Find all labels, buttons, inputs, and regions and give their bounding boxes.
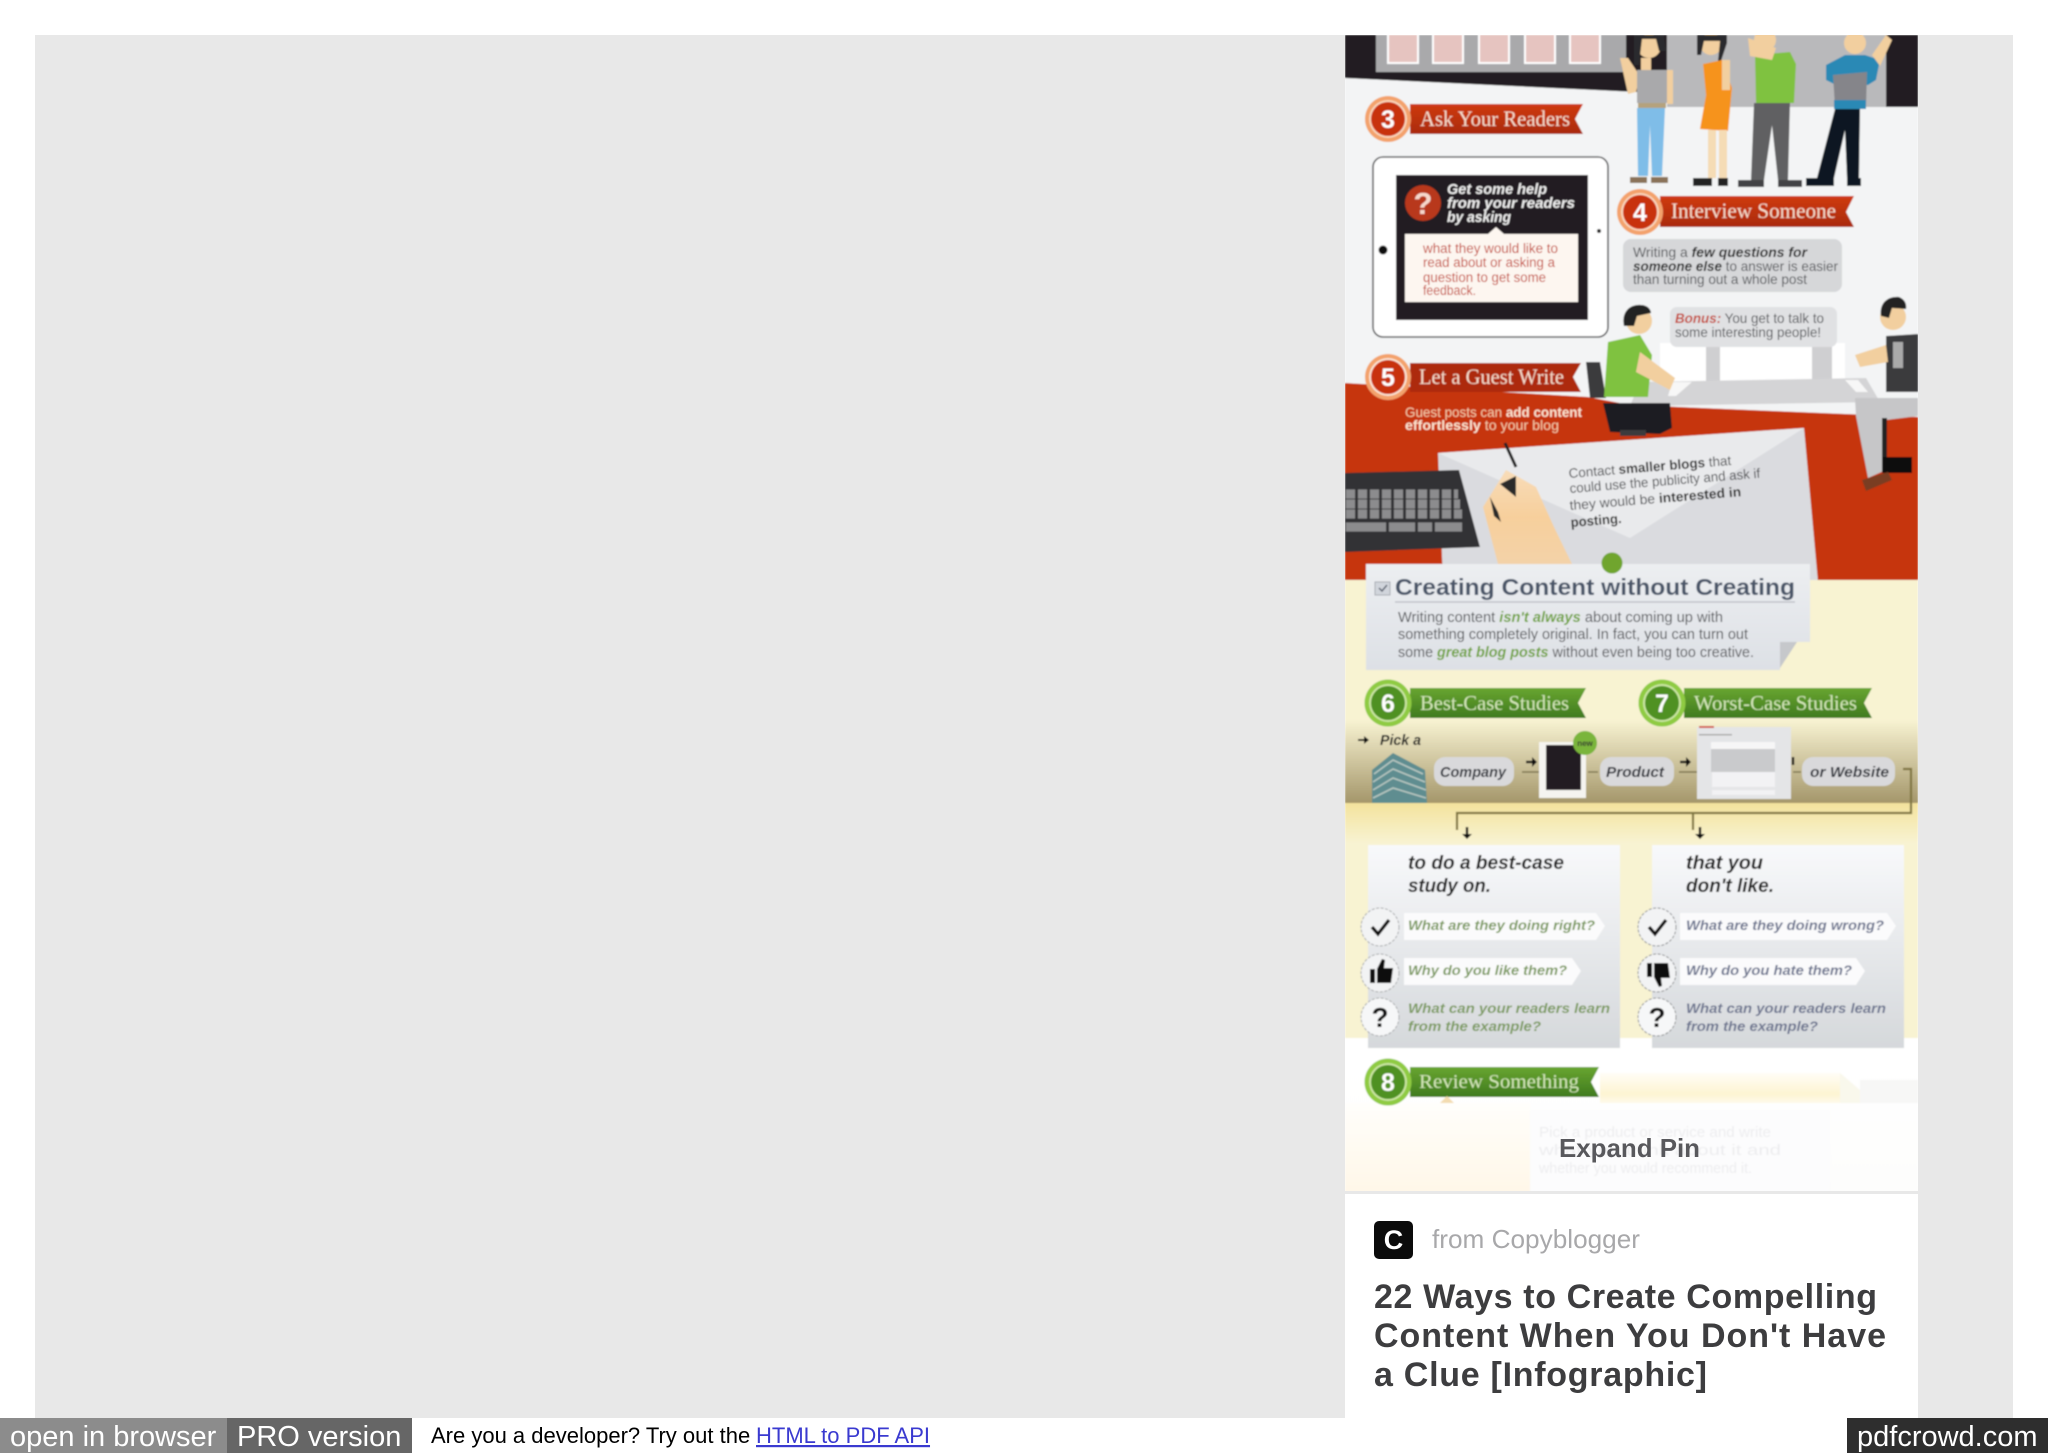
- heading: 4 Interview Someone: 4: [1633, 199, 1647, 227]
- person: interviewer in green: [1586, 305, 1675, 436]
- speech bubble: interview tip: someone else to answer is easier: [1633, 258, 1838, 274]
- envelope text: [1568, 453, 1761, 530]
- icon: question: ?: [1371, 1002, 1389, 1033]
- expand pin label: Expand Pin: [1559, 1133, 1700, 1163]
- question pills: [1404, 913, 1605, 985]
- section body text: some great blog posts without even being too creative.: [1398, 644, 1754, 661]
- pill: product: Product: [1606, 764, 1665, 781]
- infographic image: [1345, 29, 1918, 1192]
- developer promo text: [431, 1423, 930, 1448]
- question text: [1686, 917, 1886, 1034]
- question text: What can your readers learn: [1686, 1000, 1886, 1016]
- speech bubble: interview tip: than turning out a whole post: [1633, 271, 1807, 287]
- red background shape: [1345, 383, 1918, 582]
- envelope text: Contact smaller blogs that: [1568, 453, 1732, 481]
- heading: 3 Ask Your Readers: Ask Your Readers: [1420, 106, 1570, 131]
- flow: pick a company, product or website: [1358, 726, 1911, 839]
- connector to panels: [1457, 769, 1911, 839]
- panel heading: that you: [1686, 853, 1763, 874]
- panel: best case study: [1361, 845, 1620, 1048]
- question text: [1408, 917, 1610, 1034]
- heading: 3 Ask Your Readers: 3: [1381, 106, 1395, 134]
- faded review text: Pick a product or service and write: [1539, 1124, 1771, 1141]
- panel heading: don't like.: [1686, 876, 1774, 897]
- flow arrows: [1522, 757, 1801, 772]
- speech bubble: bonus: some interesting people!: [1675, 324, 1821, 340]
- question text: What can your readers learn: [1408, 1000, 1610, 1016]
- label: pick a: [1357, 733, 1422, 746]
- pin title: Content When You Don't Have: [1374, 1317, 1886, 1355]
- pin title: a Clue [Infographic]: [1374, 1356, 1707, 1394]
- tablet heading text: Get some help: [1447, 181, 1547, 198]
- faded review text: whether you would recommend it.: [1538, 1160, 1752, 1177]
- developer promo text: HTML to PDF API: [756, 1423, 930, 1448]
- icon: website browser: [1697, 726, 1791, 799]
- heading: 6 Best-Case Studies: Best-Case Studies: [1420, 691, 1569, 715]
- pin title: 22 Ways to Create Compelling: [1374, 1278, 1877, 1316]
- heading: 3 Ask Your Readers: [1365, 96, 1583, 142]
- pill: company: Company: [1440, 764, 1507, 781]
- section card: creating content without creating: [1366, 552, 1810, 670]
- speech bubble: bonus: [1670, 307, 1837, 347]
- heading: 4 Interview Someone: [1617, 189, 1854, 235]
- icon: question mark: ?: [1414, 186, 1432, 221]
- question text: What are they doing wrong?: [1686, 917, 1884, 933]
- speech bubble: interview tip: Writing a few questions for: [1633, 244, 1809, 260]
- icon: question: [1638, 998, 1676, 1036]
- heading: 7 Worst-Case Studies: [1638, 680, 1872, 726]
- pill: or website: [1802, 757, 1895, 786]
- tablet note: feedback.: [1423, 283, 1476, 298]
- tablet note: what they would like to: [1422, 241, 1558, 256]
- heading: 6 Best-Case Studies: [1364, 680, 1586, 726]
- section body text: something completely original. In fact, you can turn out: [1398, 626, 1749, 643]
- faded review text: what you think about it and: [1538, 1142, 1781, 1159]
- speech bubble: bonus: Bonus: You get to talk to: [1675, 310, 1824, 326]
- person: woman in grey top: [1620, 34, 1673, 183]
- heading: 8 Review Something: [1364, 1058, 1599, 1106]
- illustration: four people: [1620, 29, 1892, 187]
- icon: thumbs up: [1361, 954, 1399, 992]
- question text: Why do you hate them?: [1686, 962, 1852, 978]
- panel: worst case study: [1638, 845, 1904, 1048]
- question text: from the example?: [1686, 1018, 1818, 1034]
- panel heading: study on.: [1408, 876, 1491, 897]
- pill: product: [1600, 757, 1674, 786]
- section body text: Writing content isn't always about coming up with: [1398, 609, 1723, 626]
- button: open in browser: open in browser: [10, 1421, 217, 1453]
- tablet heading text: [1447, 181, 1575, 226]
- icon: building: [1372, 753, 1427, 803]
- heading: 8 Review Something: 8: [1381, 1069, 1395, 1097]
- faded review text: [1538, 1124, 1781, 1177]
- question pills: [1680, 913, 1896, 985]
- icon: check: [1361, 908, 1399, 946]
- guest post text: effortlessly to your blog: [1405, 417, 1559, 433]
- divider line: [1345, 1191, 1918, 1194]
- panel heading: [1686, 853, 1774, 897]
- envelope paper: [1438, 428, 1818, 582]
- question text: Why do you like them?: [1408, 962, 1567, 978]
- illustration: keyboard: [1345, 470, 1480, 552]
- question text: What are they doing right?: [1408, 917, 1595, 933]
- person: man in blue shirt: [1806, 32, 1892, 186]
- question text: from the example?: [1408, 1018, 1541, 1034]
- tablet with reader question: [1373, 157, 1608, 337]
- source label: from Copyblogger: [1432, 1224, 1640, 1254]
- tablet heading text: from your readers: [1447, 195, 1575, 212]
- icon: question: ?: [1648, 1002, 1666, 1033]
- envelope text: could use the publicity and ask if: [1569, 466, 1761, 496]
- top dark banner with pages: [1345, 35, 1918, 107]
- illustration: hand with cursor: [1483, 443, 1572, 564]
- cream background shape: [1345, 580, 1918, 720]
- illustration: interview at desk: [1586, 297, 1918, 491]
- icon: tablet with new badge: [1539, 731, 1597, 798]
- person: woman in orange dress: [1693, 33, 1732, 186]
- heading: 5 Let a Guest Write: 5: [1381, 364, 1395, 392]
- footer bar: [0, 1418, 2048, 1453]
- icon: tablet with new badge: new: [1577, 739, 1594, 748]
- button: pro version: PRO version: [237, 1421, 401, 1453]
- heading: 8 Review Something: Review Something: [1419, 1071, 1579, 1093]
- icon: check: [1638, 908, 1676, 946]
- faded paper behind section 8: [1345, 1073, 1918, 1192]
- pill: or website: or Website: [1810, 764, 1889, 781]
- heading: 4 Interview Someone: Interview Someone: [1671, 198, 1836, 223]
- icon: question mark: [1405, 185, 1441, 221]
- tablet note: [1405, 227, 1578, 302]
- developer promo text: Are you a developer? Try out the: [431, 1423, 750, 1448]
- desk and monitors: [1630, 343, 1880, 406]
- pdfcrowd brand: pdfcrowd.com: [1857, 1421, 2038, 1453]
- icon: question: [1361, 998, 1399, 1036]
- icon: checkbox: [1375, 582, 1390, 595]
- icon: copyblogger logo: [1374, 1221, 1413, 1259]
- guest post text: Guest posts can add content: [1405, 404, 1582, 420]
- heading: 7 Worst-Case Studies: 7: [1655, 690, 1669, 718]
- panel heading: [1408, 853, 1564, 897]
- label: pick a: Pick a: [1380, 732, 1421, 749]
- envelope text: posting.: [1570, 511, 1622, 530]
- heading: 5 Let a Guest Write: [1365, 354, 1581, 400]
- section body text: [1398, 609, 1754, 661]
- person: interviewee in vest: [1855, 297, 1918, 491]
- heading: 7 Worst-Case Studies: Worst-Case Studies: [1694, 691, 1857, 715]
- speech bubble: interview tip: [1623, 239, 1842, 292]
- pin title: [1374, 1278, 1886, 1394]
- guest post text: [1405, 404, 1582, 433]
- pill: company: [1434, 757, 1514, 786]
- tablet heading text: by asking: [1447, 209, 1511, 226]
- tablet note: question to get some: [1423, 270, 1546, 285]
- tablet note: read about or asking a: [1423, 255, 1555, 270]
- heading: 6 Best-Case Studies: 6: [1381, 690, 1395, 718]
- person: man in green shirt: [1738, 29, 1802, 187]
- icon: thumbs down: [1638, 954, 1676, 992]
- panel heading: to do a best-case: [1408, 853, 1564, 874]
- icon: copyblogger logo: C: [1384, 1225, 1403, 1255]
- envelope text: they would be interested in: [1569, 484, 1742, 513]
- pin card: [1345, 29, 1918, 1418]
- heading: 5 Let a Guest Write: Let a Guest Write: [1419, 364, 1564, 389]
- section heading: Creating Content without Creating: [1395, 574, 1795, 600]
